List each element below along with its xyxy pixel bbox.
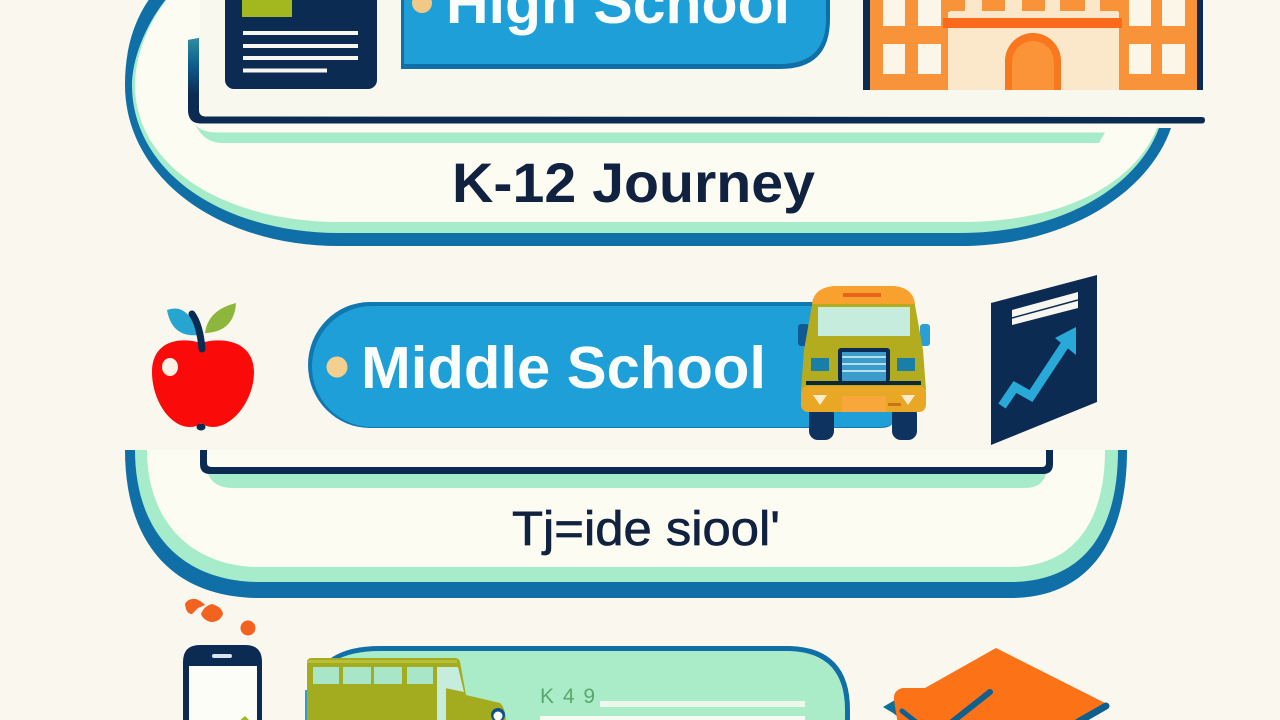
pill: Kindergarten mint bbox=[310, 646, 850, 720]
icon: graduation cap bbox=[883, 648, 1109, 720]
label: garbled school text: Tj=ide siool' bbox=[512, 503, 780, 556]
icon: orange splashes bbox=[185, 599, 256, 636]
pill: High School bbox=[401, 0, 830, 69]
pill: Middle School: Middle School bbox=[361, 335, 766, 401]
icon: growth chart bbox=[991, 275, 1097, 445]
icon: school bus side bbox=[305, 658, 506, 720]
label: K-12 Journey: K-12 Journey bbox=[452, 151, 815, 214]
panel: K-12 Journey track bbox=[125, 0, 1210, 246]
pill: Middle School bbox=[308, 302, 895, 428]
pill: Kindergarten mint: K49 bbox=[540, 685, 595, 708]
icon: apple bbox=[152, 303, 254, 430]
icon: school bus front bbox=[798, 286, 930, 440]
icon: school building bbox=[863, 0, 1203, 90]
panel: Middle school track bbox=[125, 450, 1127, 598]
icon: smartphone bbox=[183, 645, 262, 720]
icon: document bbox=[225, 0, 377, 89]
